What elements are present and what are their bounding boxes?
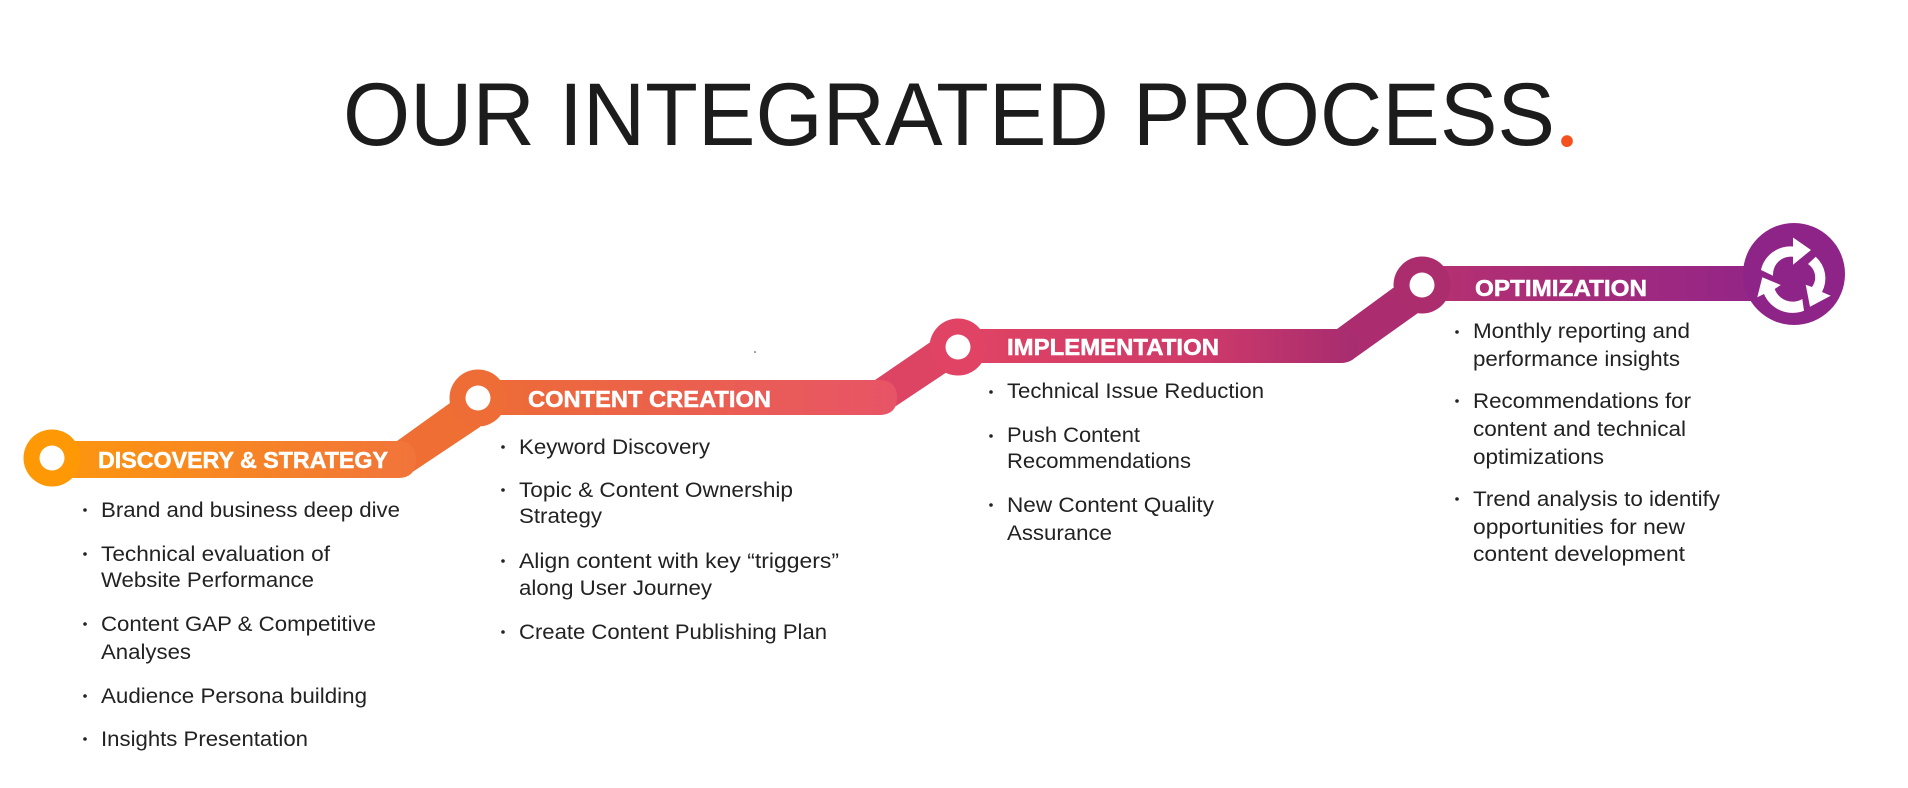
list: implementation: Recommendations	[1007, 449, 1191, 473]
list: implementation: Assurance	[1007, 521, 1112, 545]
list: discovery and strategy: Content GAP & Competitive	[101, 612, 376, 636]
heading: optimization: OPTIMIZATION	[1475, 275, 1647, 301]
title: OUR INTEGRATED PROCESS	[343, 64, 1555, 164]
list: content creation	[501, 435, 839, 644]
list: content creation: Create Content Publishing Plan	[519, 620, 827, 644]
step bar: discovery and strategy	[52, 441, 416, 478]
connector: discovery to content creation	[395, 398, 480, 478]
list: content creation: Keyword Discovery	[519, 435, 710, 459]
list: optimization: content development	[1473, 542, 1685, 566]
list: discovery and strategy: Analyses	[101, 640, 191, 664]
speck	[754, 351, 756, 353]
list: discovery and strategy: Insights Presentation	[101, 727, 308, 751]
connector: content creation to implementation	[875, 341, 958, 415]
step marker: content creation	[450, 370, 506, 426]
step bar: optimization	[1422, 266, 1762, 301]
list: content creation: Align content with key “triggers”	[519, 549, 839, 573]
step marker: implementation	[930, 318, 986, 376]
step marker: discovery and strategy	[24, 430, 80, 486]
list: discovery and strategy	[83, 498, 400, 751]
list: optimization: performance insights	[1473, 347, 1680, 371]
heading: discovery and strategy: DISCOVERY & STRATEGY	[98, 447, 388, 473]
list: optimization: Recommendations for	[1473, 389, 1691, 413]
heading: implementation: IMPLEMENTATION	[1007, 334, 1219, 360]
list: optimization: Monthly reporting and	[1473, 319, 1690, 343]
list: implementation: Push Content	[1007, 423, 1140, 447]
list: optimization: Trend analysis to identify	[1473, 487, 1720, 511]
heading: content creation: CONTENT CREATION	[528, 386, 771, 412]
list: content creation: Topic & Content Ownership	[519, 478, 793, 502]
list: optimization	[1455, 319, 1720, 566]
step bar: content creation	[478, 380, 897, 415]
list: optimization: opportunities for new	[1473, 515, 1685, 539]
panel: content creation	[450, 341, 958, 644]
list: discovery and strategy: Technical evaluation of	[101, 542, 330, 566]
list: implementation: New Content Quality	[1007, 493, 1214, 517]
list: content creation: along User Journey	[519, 576, 712, 600]
icon: circular arrows	[1743, 223, 1845, 325]
title: .	[1558, 82, 1576, 162]
step bar: implementation	[958, 329, 1358, 363]
panel: implementation	[930, 285, 1422, 545]
list: implementation	[989, 379, 1264, 545]
list: discovery and strategy: Website Performance	[101, 568, 314, 592]
panel: discovery and strategy	[24, 398, 480, 751]
list: implementation: Technical Issue Reduction	[1007, 379, 1264, 403]
list: content creation: Strategy	[519, 504, 602, 528]
list: optimization: optimizations	[1473, 445, 1604, 469]
list: discovery and strategy: Audience Persona building	[101, 684, 367, 708]
list: discovery and strategy: Brand and business deep dive	[101, 498, 400, 522]
panel: optimization	[1394, 223, 1845, 566]
list: optimization: content and technical	[1473, 417, 1686, 441]
step marker: optimization	[1394, 256, 1450, 314]
connector: implementation to optimization	[1337, 285, 1422, 363]
